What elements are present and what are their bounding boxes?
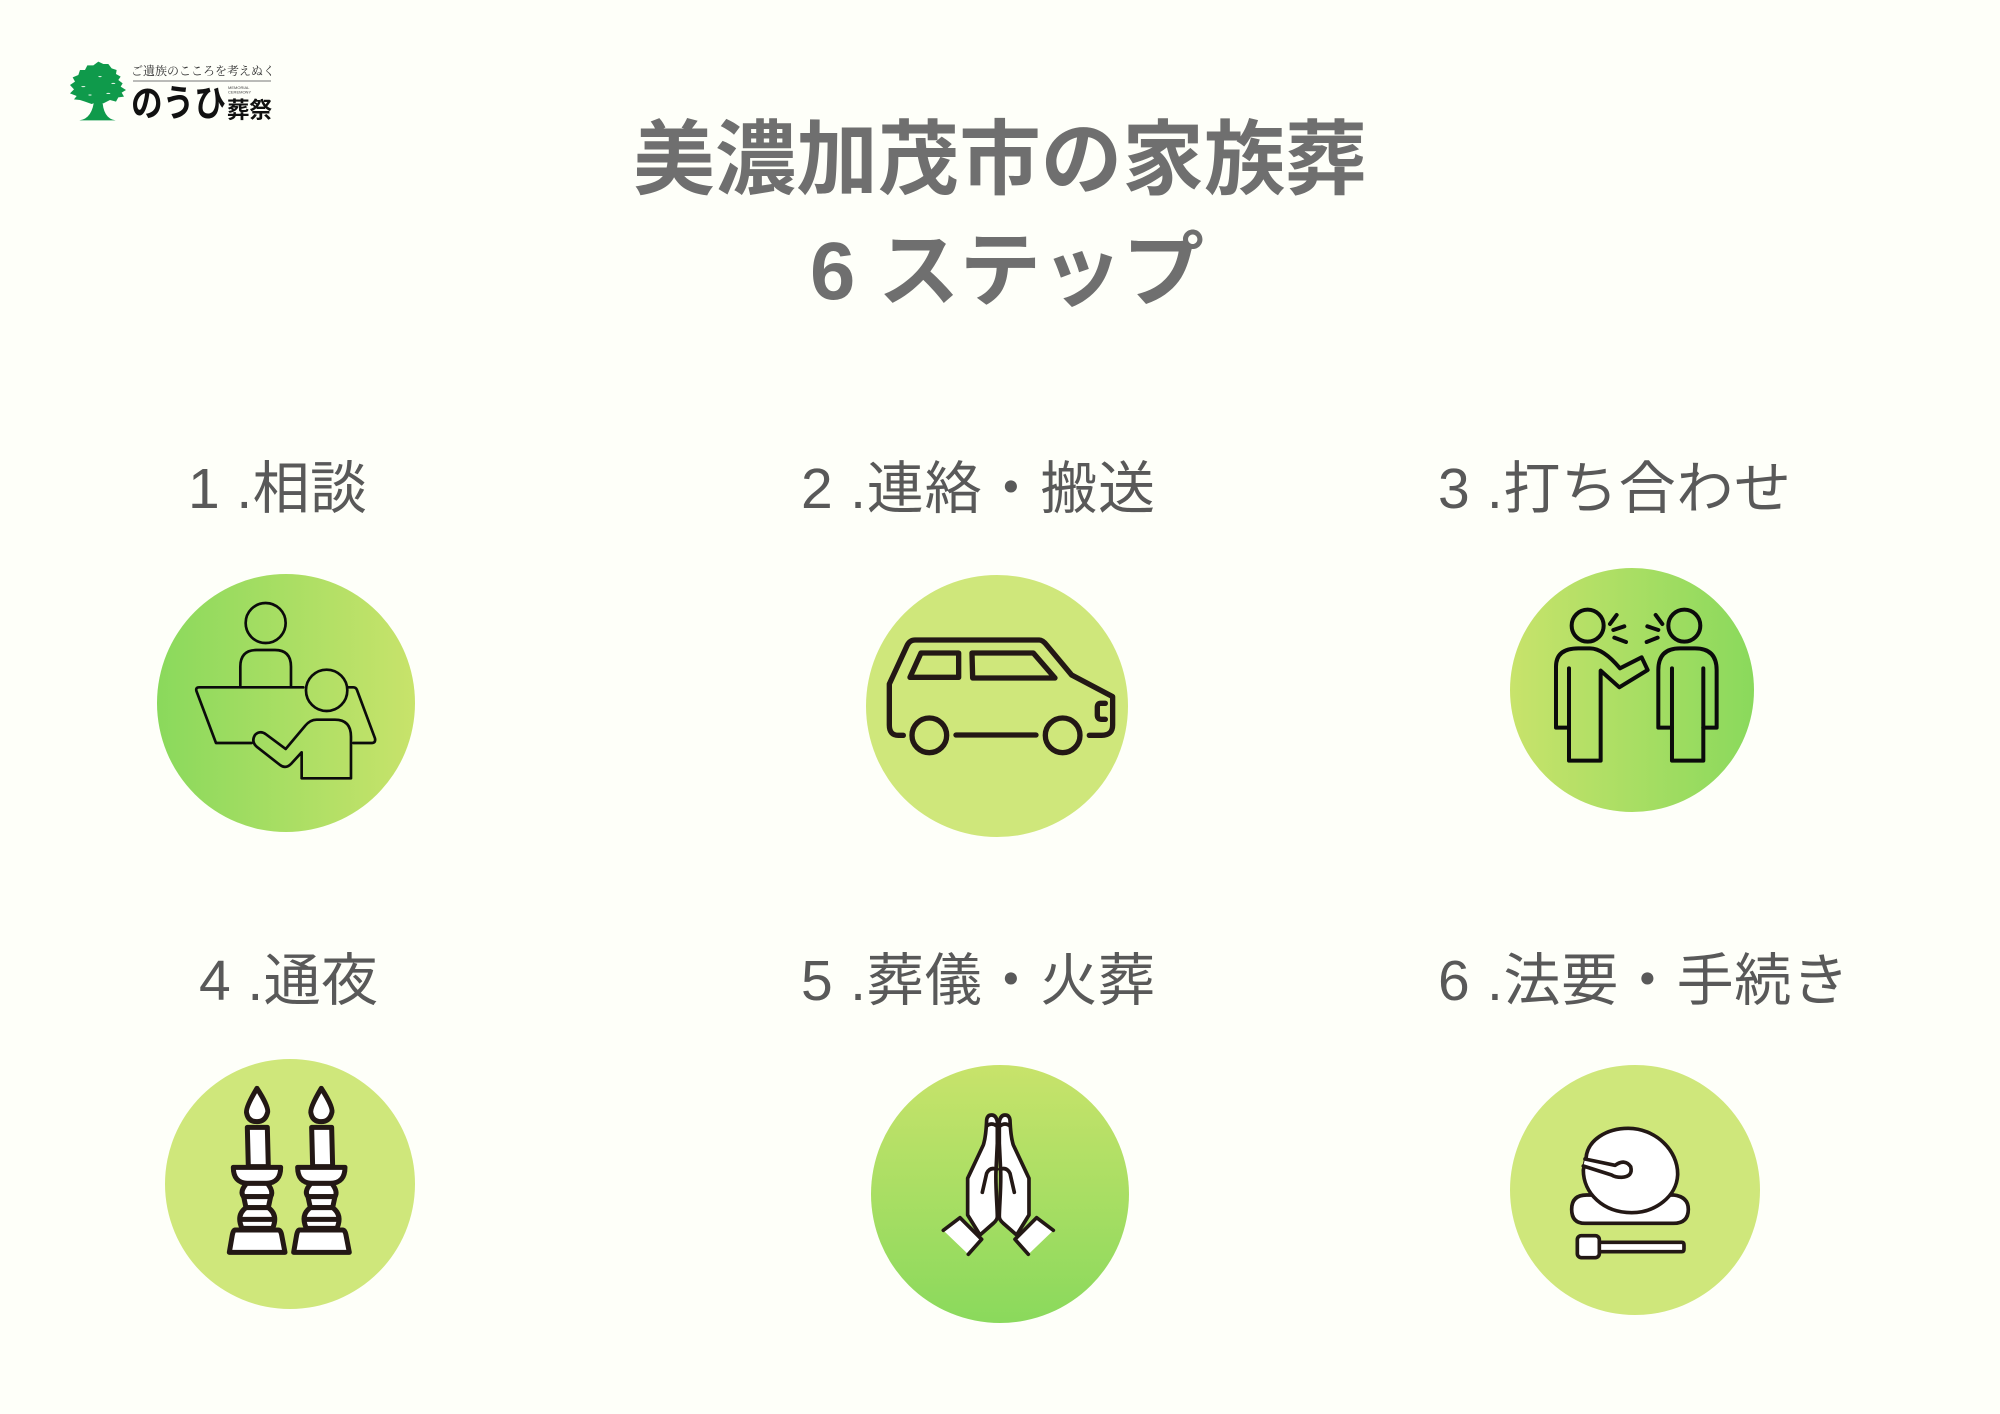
- step 2 heading: 2 .連絡・搬送: [801, 457, 1155, 521]
- logo: のうひ葬祭: CEREMONY: [228, 90, 251, 94]
- title: [633, 114, 1367, 317]
- step 6 heading: 6 .法要・手続き: [1438, 949, 1849, 1013]
- icon: praying hands: [871, 1065, 1129, 1323]
- icon: candles: [165, 1059, 415, 1309]
- logo: のうひ葬祭: [70, 62, 275, 124]
- logo tagline: ご遺族のこころを考えぬく: [131, 63, 275, 78]
- logo name: のうひ: [131, 83, 226, 124]
- step 5 heading: 5 .葬儀・火葬: [801, 949, 1155, 1013]
- icon: consultation at desk: [157, 574, 415, 832]
- icon: two people talking: [1510, 568, 1754, 812]
- step 4 heading: 4 .通夜: [199, 949, 378, 1013]
- logo funeral text: 葬祭: [227, 98, 273, 123]
- title: 6 ステップ: [810, 226, 1204, 317]
- step 1 heading: 1 .相談: [188, 457, 367, 521]
- icon: car: [866, 575, 1128, 837]
- step 3 heading: 3 .打ち合わせ: [1438, 457, 1791, 521]
- icon: green tree: [70, 62, 126, 120]
- title: 美濃加茂市の家族葬: [633, 114, 1367, 206]
- logo sub-label: MEMORIAL: [228, 85, 250, 90]
- icon: singing bowl and mallet: [1510, 1065, 1760, 1315]
